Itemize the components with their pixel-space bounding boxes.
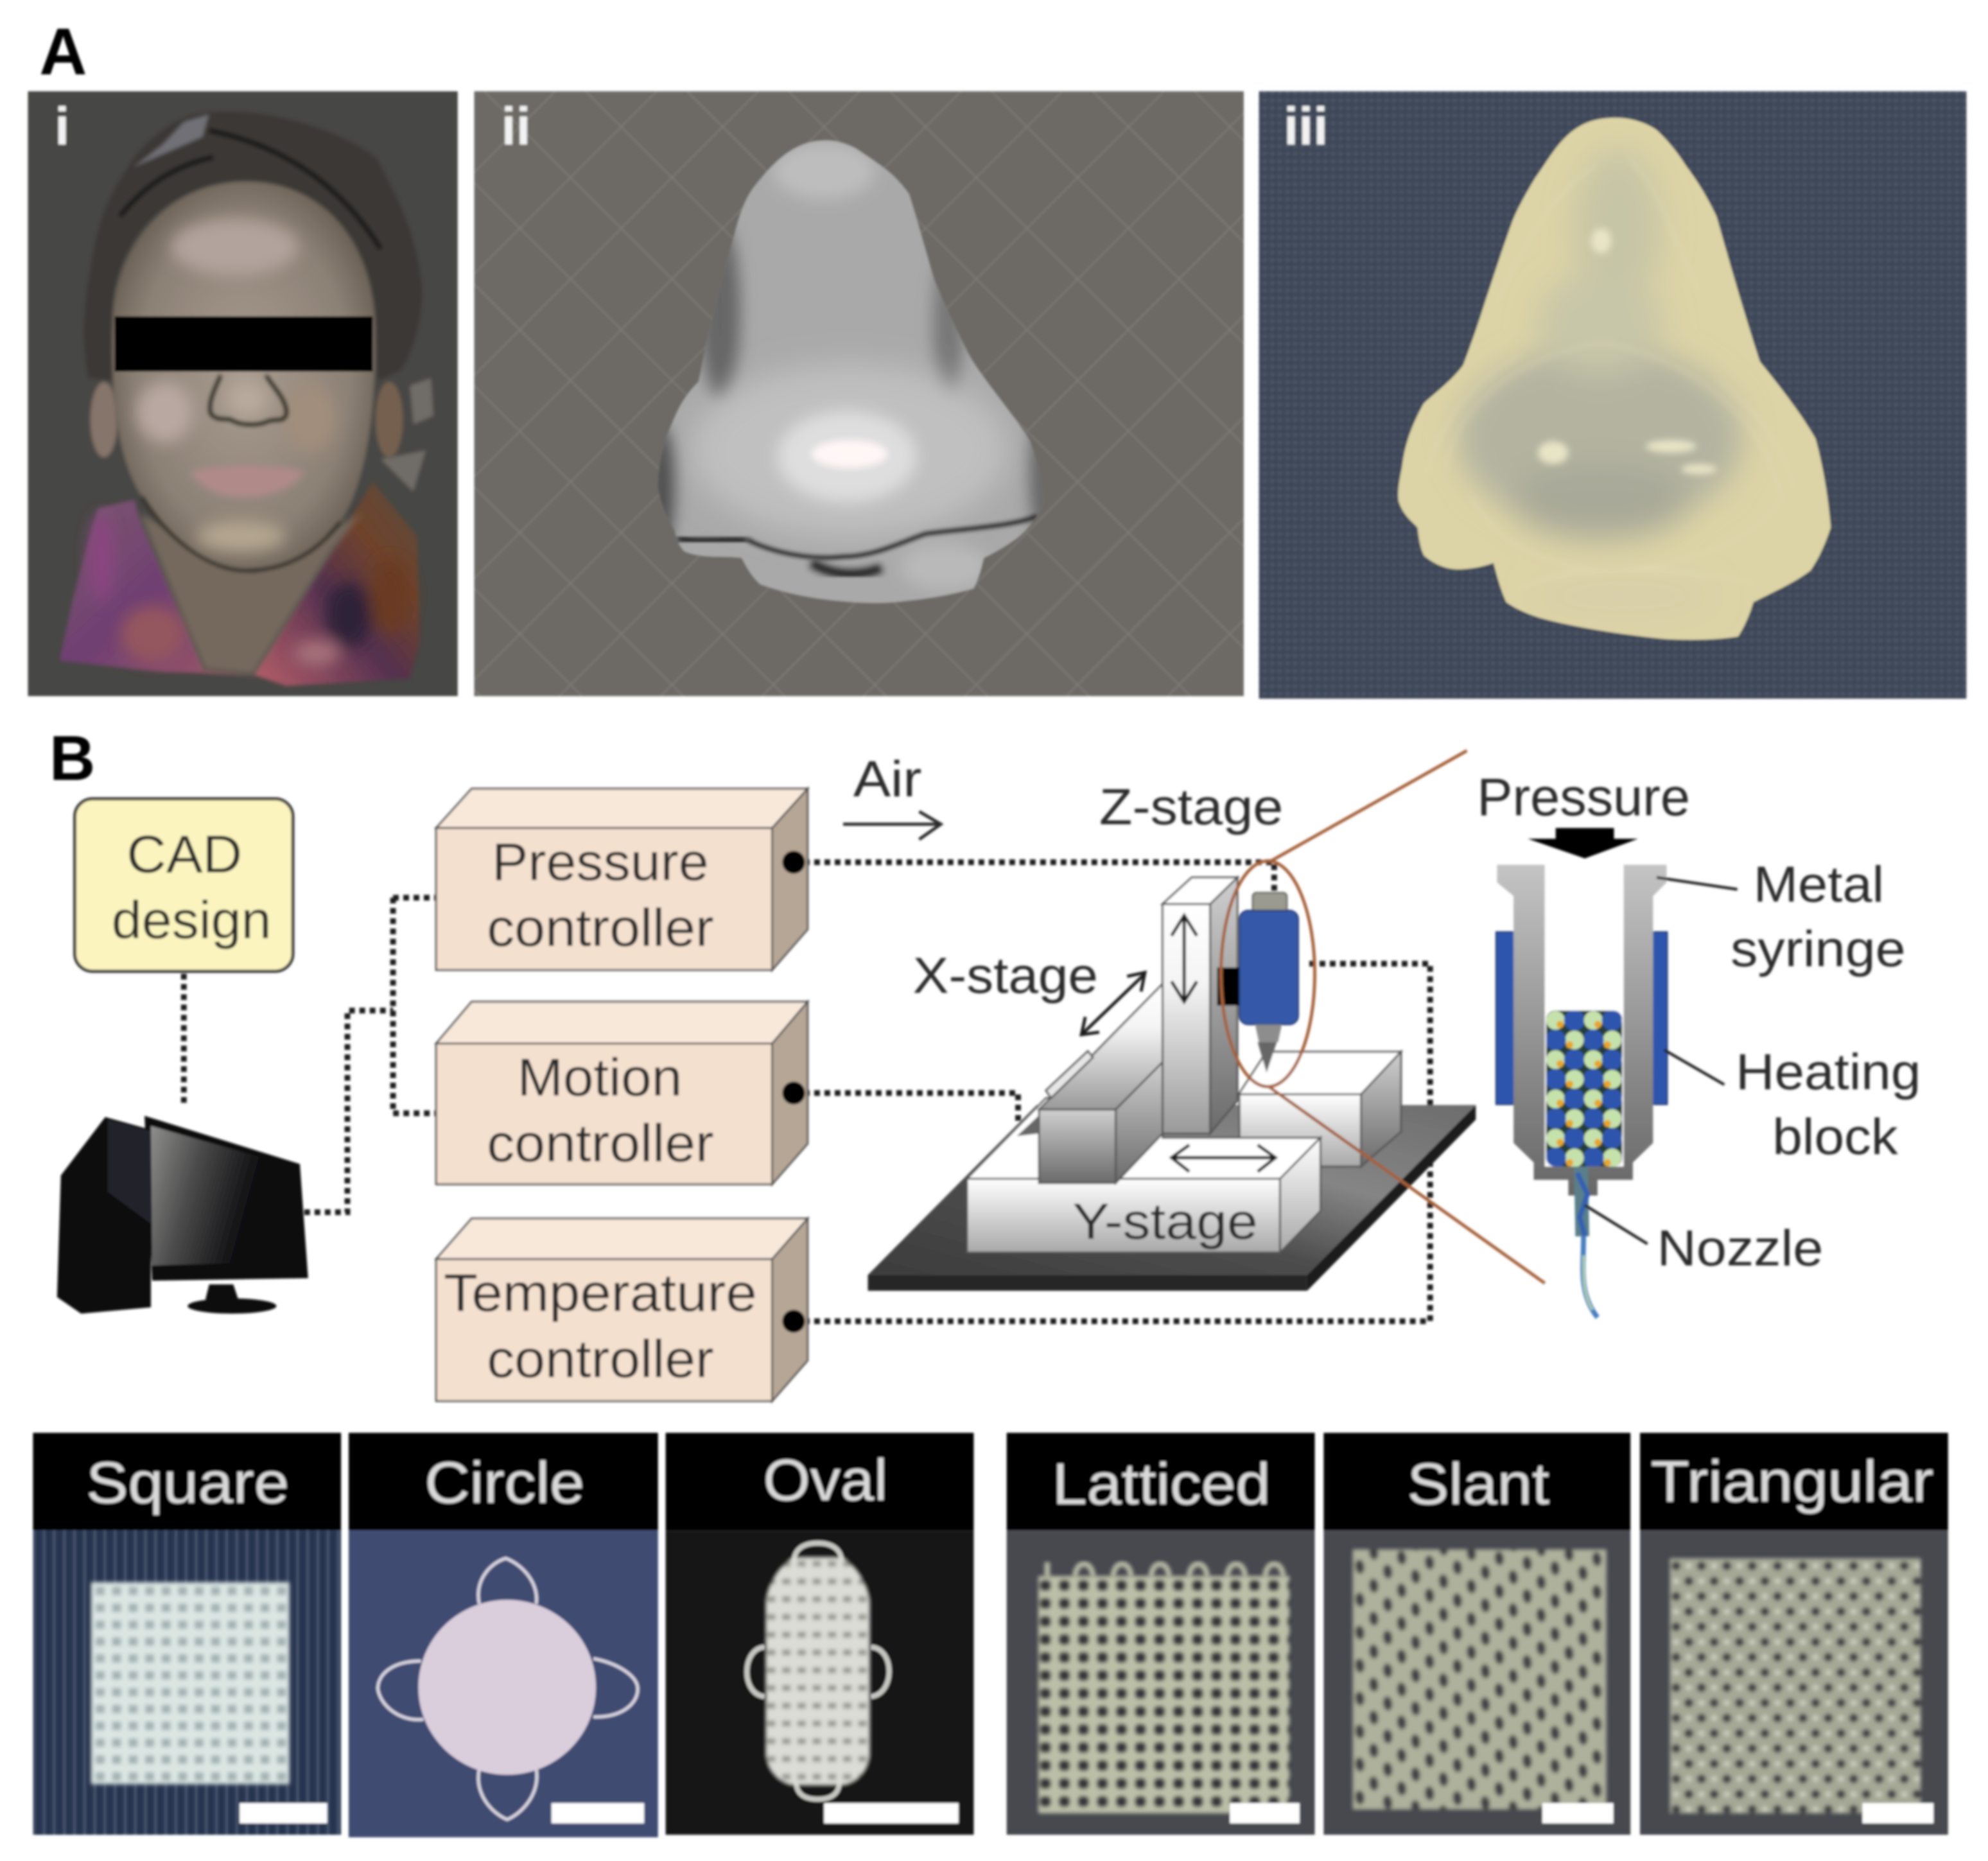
panel: iii printed nose — [1259, 91, 1966, 699]
hair — [84, 112, 422, 380]
scarf and collar — [60, 482, 420, 686]
nostril shading — [677, 516, 1037, 574]
box: temperature controller: Temperature — [444, 1263, 757, 1323]
box: motion controller: controller — [487, 1114, 714, 1173]
label i: i — [55, 96, 69, 156]
heating block label: Heating — [1736, 1044, 1921, 1100]
panel: oval scaffold: Oval — [763, 1448, 887, 1513]
panel: slant scaffold — [1323, 1433, 1630, 1835]
syringe cylinder — [1239, 893, 1298, 1072]
alar edge shadows — [656, 424, 1045, 537]
panel: ii nose model — [474, 91, 1244, 696]
nose model body — [658, 139, 1040, 604]
panel: circle scaffold: Circle — [424, 1451, 584, 1516]
stage side patch — [1017, 1116, 1038, 1136]
dispenser mount — [1217, 968, 1240, 1006]
air label and arrow: Air — [853, 751, 921, 807]
ears — [90, 381, 118, 458]
panel: triangular scaffold: Triangular — [1651, 1449, 1933, 1514]
alar base shading — [902, 546, 983, 590]
panel: latticed scaffold: Latticed — [1052, 1452, 1270, 1517]
heating block label: block — [1772, 1108, 1898, 1165]
label iii: iii — [1284, 96, 1328, 156]
nozzle label: Nozzle — [1657, 1220, 1823, 1277]
box: temperature controller: controller — [487, 1329, 714, 1388]
panel: latticed scaffold — [1007, 1433, 1315, 1835]
x stage — [1039, 984, 1163, 1183]
y-stage label: Y-stage — [1072, 1193, 1258, 1250]
panel B label: B — [49, 722, 95, 793]
CAD design box: CAD — [126, 824, 242, 884]
panel: oval scaffold — [666, 1433, 973, 1835]
face — [112, 181, 376, 571]
base plate — [868, 1105, 1476, 1275]
back block — [1239, 1052, 1401, 1167]
box: temperature controller — [436, 1219, 808, 1401]
panel: triangular scaffold — [1640, 1433, 1948, 1835]
face highlights — [137, 220, 336, 552]
pressure arrow — [1528, 828, 1638, 859]
panel A label: A — [39, 15, 87, 89]
metal syringe label: syringe — [1731, 921, 1906, 977]
scarf colour patches — [89, 514, 411, 666]
printer stage assembly — [868, 861, 1476, 1291]
icon: computer — [57, 1116, 308, 1314]
zoom leader lines — [1269, 751, 1545, 1283]
zoom ellipse — [1221, 861, 1315, 1087]
panel: circle scaffold — [349, 1433, 658, 1837]
syringe wall — [1497, 865, 1666, 1196]
box: pressure controller — [436, 789, 808, 970]
extruded filament — [1577, 1167, 1598, 1318]
printed nose — [1396, 116, 1833, 642]
printed layer swirl lines — [1426, 159, 1794, 590]
eye bar — [115, 317, 372, 372]
box: pressure controller: controller — [487, 898, 714, 957]
metal syringe label: Metal — [1754, 856, 1884, 913]
air label and arrow — [843, 751, 941, 839]
CAD design box: design — [112, 890, 272, 950]
neck — [139, 514, 362, 674]
heating block — [1496, 932, 1667, 1105]
lips — [190, 466, 304, 497]
metal syringe label — [1657, 856, 1906, 977]
heating block label — [1664, 1044, 1921, 1165]
box: pressure controller: Pressure — [492, 832, 709, 891]
nozzle label — [1585, 1205, 1823, 1277]
dotted connectors — [184, 862, 1430, 1321]
metal syringe cross-section — [1496, 862, 1667, 1318]
y stage — [967, 1098, 1320, 1252]
CAD design box — [74, 799, 293, 971]
panel: i face scan — [28, 91, 458, 696]
box: motion controller — [436, 1002, 808, 1184]
label ii: ii — [501, 96, 531, 156]
panel: slant scaffold: Slant — [1408, 1452, 1549, 1517]
z column — [1163, 877, 1237, 1133]
bio-ink beads — [1546, 1011, 1622, 1167]
panel: square scaffold — [33, 1433, 341, 1835]
z-stage label: Z-stage — [1099, 778, 1283, 835]
bulb shading — [691, 364, 1008, 536]
surface translucency — [1458, 150, 1742, 614]
panel: square scaffold: Square — [86, 1451, 289, 1516]
box: motion controller: Motion — [518, 1047, 682, 1107]
nose shadow lines — [210, 375, 286, 424]
bridge shading — [700, 143, 964, 399]
motion arrows — [1081, 916, 1275, 1171]
x-stage label: X-stage — [913, 947, 1098, 1004]
pressure label: Pressure — [1477, 767, 1690, 827]
specular flecks — [1538, 228, 1716, 474]
